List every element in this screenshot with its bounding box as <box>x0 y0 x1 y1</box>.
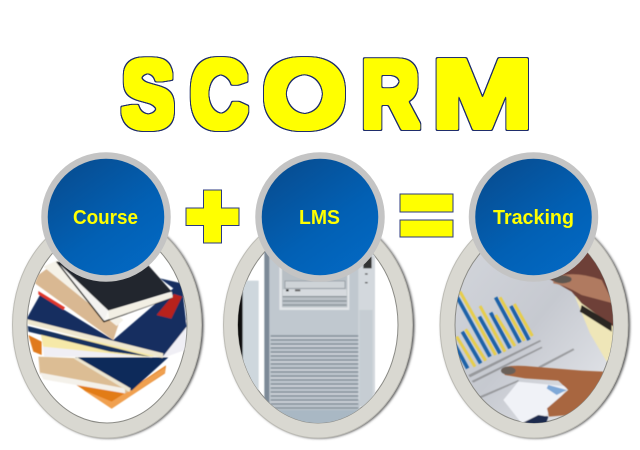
letter M: M <box>432 41 533 148</box>
badge: LMS <box>258 156 382 278</box>
letter O: O <box>262 41 346 148</box>
panel: LMS oval with server <box>224 212 414 438</box>
photo: stack of books <box>27 260 187 409</box>
photo: server tower <box>237 250 375 425</box>
connector: equals sign <box>400 194 453 237</box>
badge: Course <box>44 156 168 278</box>
badge: Course: Course <box>73 207 138 229</box>
oval frame shadow <box>224 212 414 438</box>
connector: plus sign <box>186 190 239 243</box>
photo: hand pointing at bar chart <box>455 247 618 427</box>
oval picture background <box>455 227 613 423</box>
panel: tracking oval with chart <box>440 212 630 438</box>
oval frame shadow <box>14 212 204 438</box>
badge: LMS: LMS <box>299 207 340 229</box>
title: SCORM <box>122 41 533 148</box>
badge: Tracking <box>472 156 595 278</box>
letter C: C <box>190 41 248 148</box>
panel: course oval with books <box>12 212 204 438</box>
oval frame <box>440 212 628 438</box>
badge: Tracking: Tracking <box>493 207 574 229</box>
oval frame <box>224 212 412 438</box>
letter R: R <box>362 41 419 148</box>
oval frame <box>12 212 202 438</box>
oval picture background <box>27 227 187 423</box>
oval frame shadow <box>441 212 630 438</box>
oval picture background <box>238 227 398 423</box>
letter S: S <box>122 41 174 148</box>
